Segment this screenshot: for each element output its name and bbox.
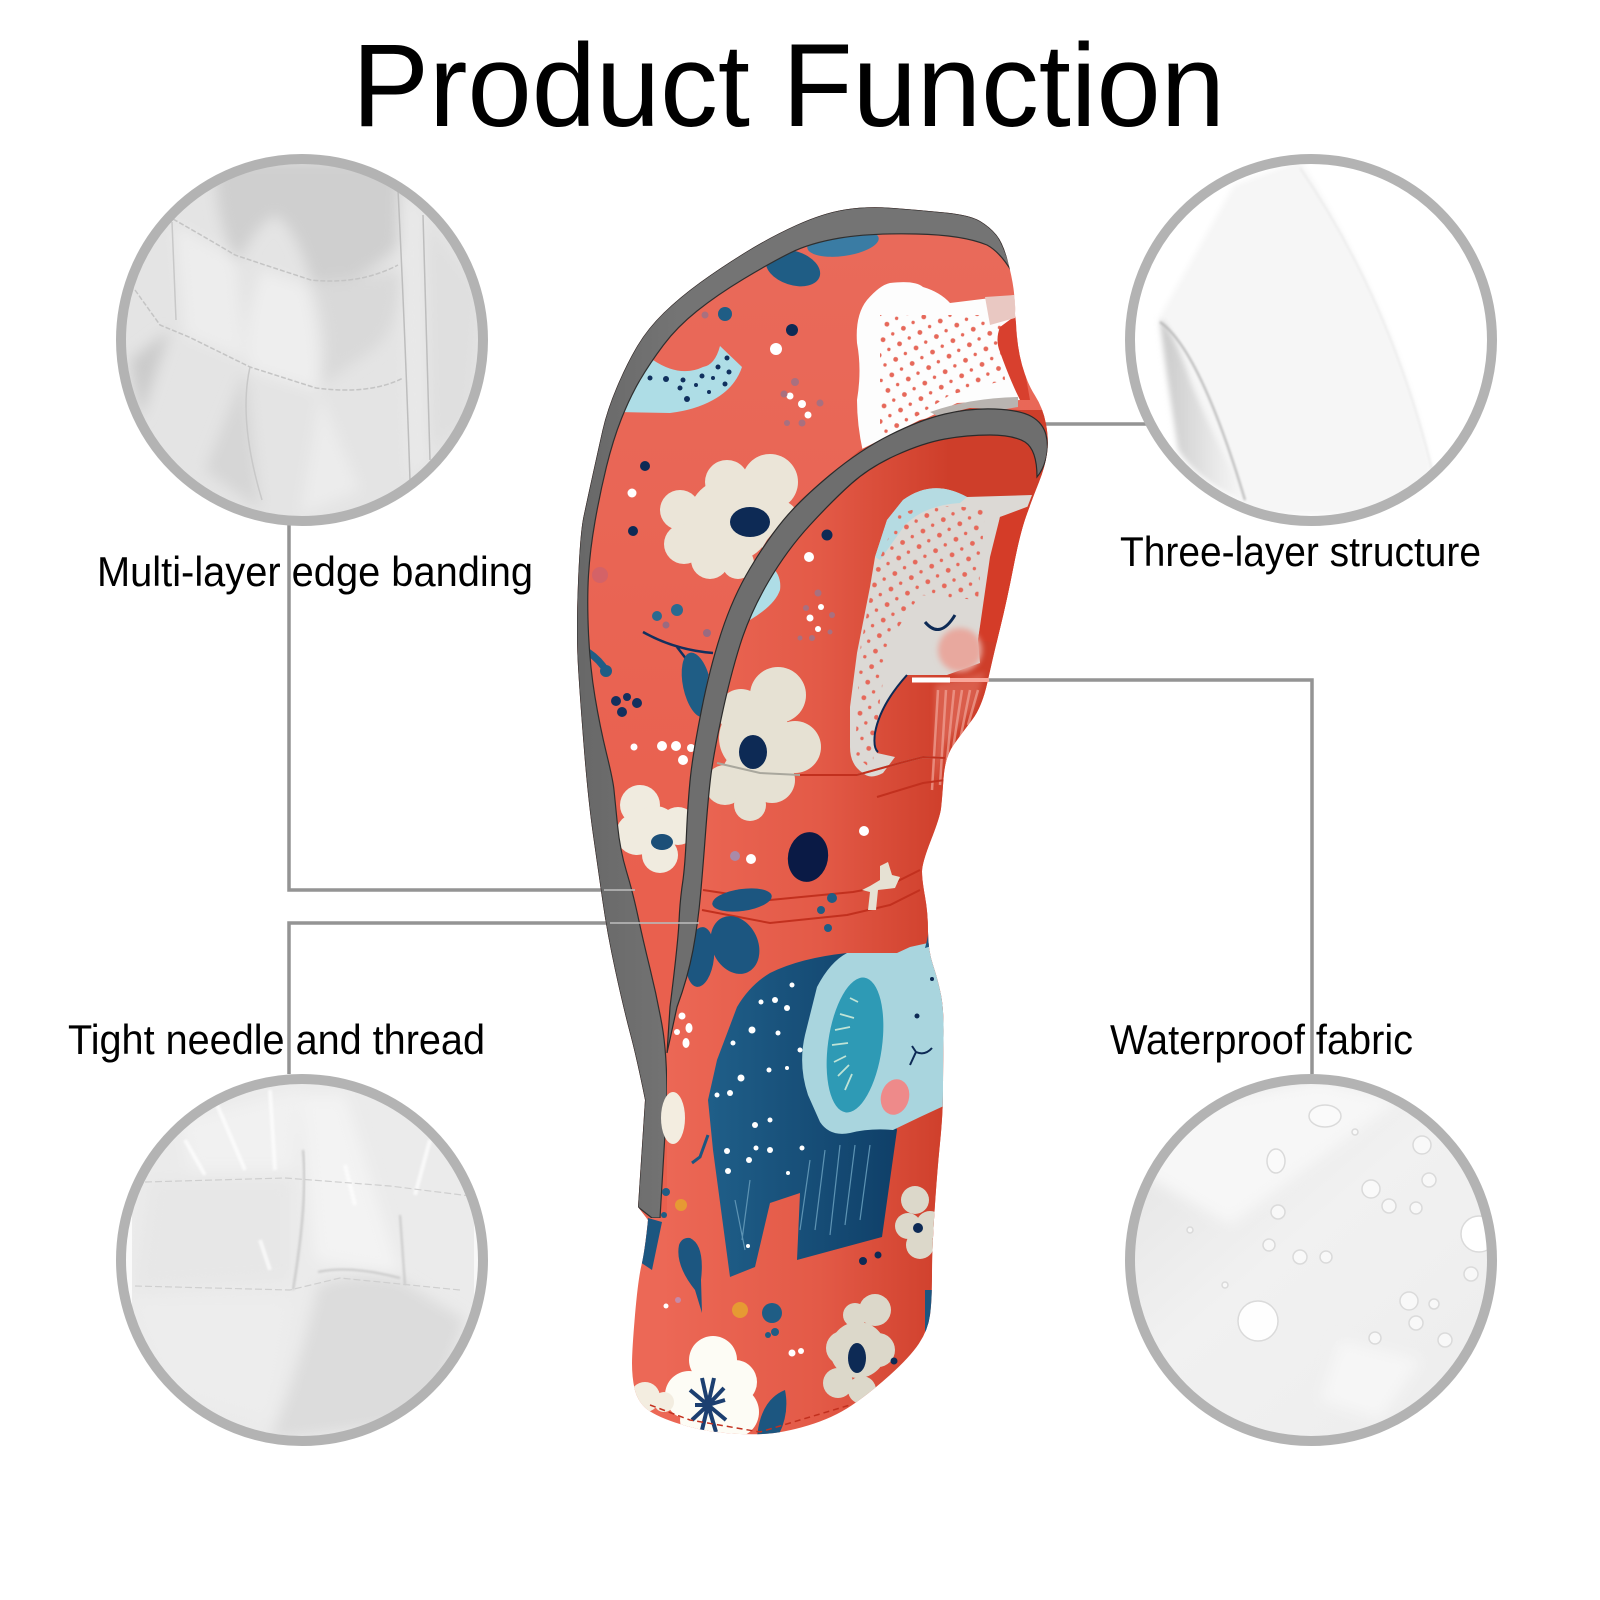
right cream flower <box>895 1186 934 1259</box>
ear stripes <box>832 998 858 1090</box>
dots on front panel <box>798 530 835 641</box>
back panel fabric <box>560 190 1060 1250</box>
leader line: multi-layer edge banding <box>289 525 604 890</box>
blue elephant head <box>802 943 946 1134</box>
dots on back panel <box>592 307 824 765</box>
leaf and branch on back panel <box>588 632 718 720</box>
panel: three-layer structure detail circle <box>1125 154 1497 526</box>
lower hem stitching <box>650 1405 850 1432</box>
cheek and face <box>880 1079 910 1115</box>
cream flower on front panel <box>705 667 821 821</box>
label: tight needle and thread: Tight needle and thread <box>68 1016 485 1063</box>
leader line: three-layer structure <box>1045 422 1150 426</box>
panel: waterproof fabric detail circle <box>1125 1074 1497 1446</box>
leader line: waterproof fabric <box>985 680 1312 1074</box>
bottom leaves and dots <box>630 1188 935 1438</box>
leader line: tight needle and thread <box>289 923 610 1074</box>
front binding band <box>667 409 1048 1053</box>
lower white-cream flower <box>823 1294 895 1404</box>
navy spot and dots <box>730 826 869 932</box>
white specks on body <box>714 982 804 1248</box>
small cross flower <box>862 862 900 910</box>
panel: tight needle and thread detail circle <box>116 1074 488 1446</box>
label: multi-layer edge banding: Multi-layer edge banding <box>97 548 533 595</box>
navy leaves <box>688 888 772 987</box>
elephant head top panel <box>857 282 1030 452</box>
blue elephant <box>692 925 946 1277</box>
leaves at top of back panel <box>766 234 879 286</box>
bottom white flower with navy star <box>665 1336 759 1440</box>
sleeping white elephant on front panel <box>850 488 1032 790</box>
product: golf head cover with elephant print <box>560 190 1060 1450</box>
light-blue motif beside front band <box>750 571 780 620</box>
blue elephant body <box>708 953 897 1277</box>
label: waterproof fabric: Waterproof fabric <box>1110 1016 1413 1063</box>
leader line overlays on product <box>604 680 989 923</box>
back binding band <box>577 207 1012 1218</box>
flower on back panel <box>660 454 801 579</box>
small flower on back panel <box>618 785 688 873</box>
water droplets <box>1187 1105 1497 1347</box>
ear inner <box>826 978 884 1112</box>
front panel fabric <box>620 408 1060 1450</box>
light-blue arc motif <box>618 346 742 413</box>
gathered elastic stitching <box>702 757 945 923</box>
title: Product Function <box>352 20 1225 152</box>
white dots beside band end <box>661 1012 692 1144</box>
label: three-layer structure: Three-layer structure <box>1120 528 1481 575</box>
panel: multi-layer edge banding detail circle <box>116 154 488 526</box>
